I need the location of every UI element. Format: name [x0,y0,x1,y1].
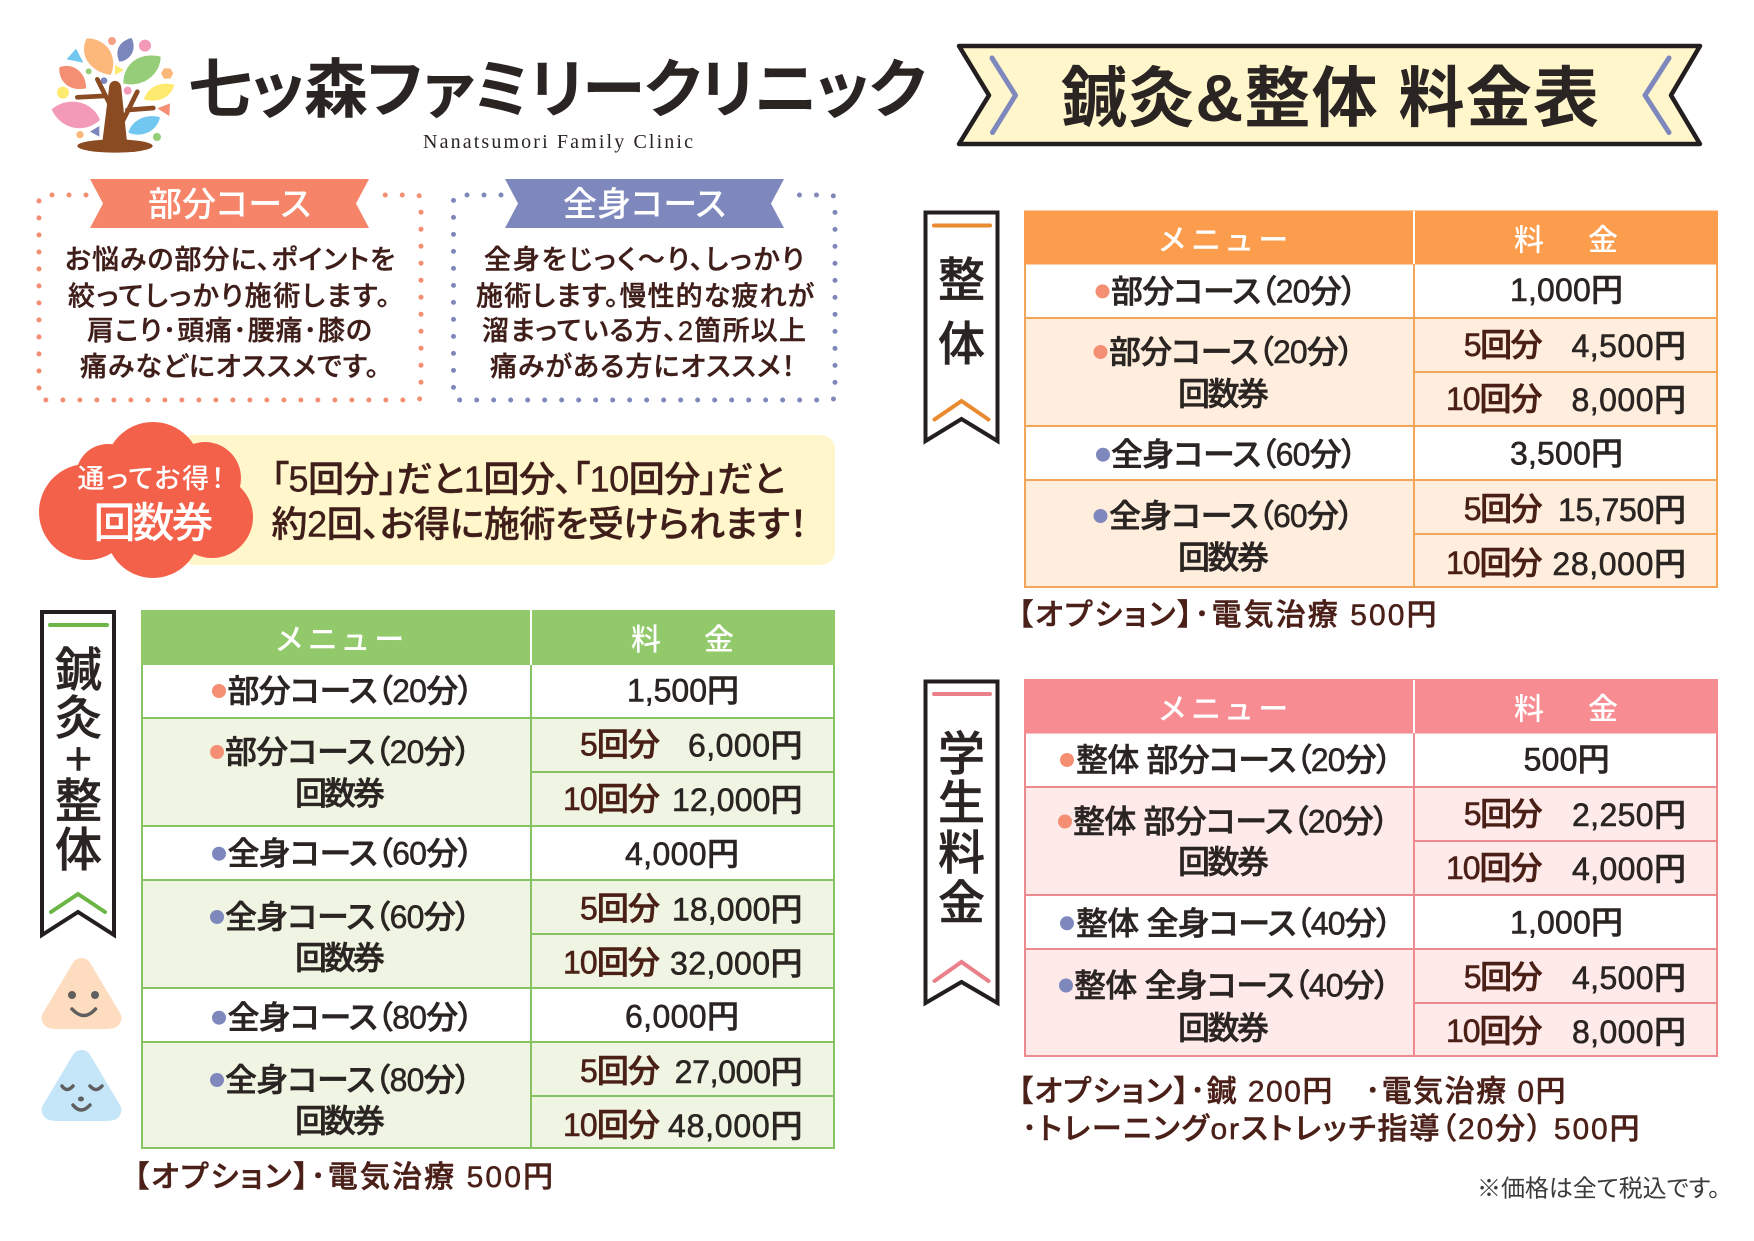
description: full body course: 痛みがある方にオススメ！ [490,352,795,382]
panel: partial course [39,179,421,400]
badge text [78,464,224,546]
row: seitai full body 40 min tickets: 整体 全身コース（40分） [1074,968,1390,1004]
row: full body 60 min tickets: 回数券 [1178,540,1269,576]
row: partial 20 min tickets: 部分コース（20分） [1109,334,1354,370]
table header: 料 金 [631,624,734,657]
row: full body 60 min tickets: 28,000円 [1552,546,1686,582]
table header: 料 金 [1514,224,1618,258]
row: partial 20 min [212,673,739,709]
row: full body 60 min tickets: 5回分 [1464,491,1543,527]
row: partial 20 min [1096,272,1623,309]
table: seitai prices [1024,210,1718,587]
description: partial course [65,245,395,382]
row: seitai full body 40 min tickets: 10回分 [1446,1013,1542,1049]
row: full body 80 min tickets: 48,000円 [668,1108,802,1144]
row: full body 60 min tickets: 10回分 [563,944,660,980]
callout: coupon tickets [39,422,835,578]
option note: acupuncture + seitai: 【オプション】･電気治療 500円 [134,1161,553,1194]
row: full body 60 min [1096,436,1623,473]
callout message [271,458,808,544]
row: seitai full body 40 min: 1,000円 [1510,904,1623,940]
description: full body course: 全身をじっく～り、しっかり [484,245,804,275]
banner: partial course [90,179,369,228]
option notes: student prices: 【オプション】･鍼 200円 ･電気治療 0円 [1018,1076,1566,1108]
ribbon label: student prices [926,682,998,1003]
table: acupuncture + seitai prices [141,610,835,1148]
ribbon label: acupuncture + seitai: 体 [55,824,102,876]
row: full body 60 min tickets [210,890,802,981]
clinic name in English: Nanatsumori Family Clinic [423,131,693,153]
row: partial 20 min tickets: 回数券 [1178,376,1269,412]
ribbon label: acupuncture + seitai [42,612,114,935]
row: full body 80 min tickets: 全身コース（80分） [225,1062,471,1098]
row: full body 80 min: 全身コース（80分） [228,1000,474,1036]
ribbon label: student prices: 生 [938,776,985,830]
row: partial 20 min tickets [1094,327,1686,418]
ribbon label: acupuncture + seitai: 灸 [55,692,102,744]
description: partial course: 絞ってしっかり施術します。 [68,282,390,312]
callout message: 約2回、お得に施術を受けられます！ [272,504,808,544]
description: partial course: 痛みなどにオススメです。 [80,352,379,382]
option note: seitai: 【オプション】･電気治療 500円 [1018,599,1436,632]
row: seitai partial 20 min tickets: 2,250円 [1572,797,1686,833]
ribbon label: seitai [926,212,998,441]
row: partial 20 min tickets [210,726,802,818]
row: seitai full body 40 min: 整体 全身コース（40分） [1076,905,1392,941]
row: full body 60 min tickets: 全身コース（60分） [225,899,471,935]
tax note: ※価格は全て税込です。 [1477,1176,1720,1202]
row: full body 60 min: 全身コース（60分） [1111,437,1357,473]
badge text: 回数券 [94,500,214,546]
banner: full body course: 全身コース [563,186,726,224]
row: seitai partial 20 min tickets: 4,000円 [1572,851,1686,887]
row: full body 80 min [212,999,739,1036]
row: full body 60 min [212,836,739,872]
ribbon label: seitai: 整 [938,254,985,306]
row: seitai full body 40 min [1060,904,1623,941]
row: full body 60 min tickets: 全身コース（60分） [1109,498,1354,534]
clinic name: 七ッ森ファミリークリニック [188,54,926,126]
row: full body 60 min tickets: 10回分 [1446,545,1542,581]
ribbon label: acupuncture + seitai: 鍼 [55,644,102,696]
row: full body 80 min tickets [210,1053,803,1144]
callout message: 「5回分」だと1回分、「10回分」だと [271,458,785,500]
row: partial 20 min tickets: 5回分 [1464,327,1543,363]
row: partial 20 min: 1,000円 [1510,272,1623,308]
row: partial 20 min tickets: 5回分 [580,726,660,762]
row: partial 20 min tickets: 回数券 [295,776,385,812]
row: seitai partial 20 min tickets: 回数券 [1178,844,1269,880]
row: full body 60 min tickets: 18,000円 [672,892,802,928]
clinic logo: colorful tree [52,37,174,153]
callout cloud badge [39,422,253,578]
ribbon label: student prices: 金 [938,876,985,930]
row: seitai full body 40 min tickets: 5回分 [1464,959,1543,995]
icon: sleeping blue face [52,1060,111,1111]
row: partial 20 min: 1,500円 [627,673,739,709]
ribbon label: seitai: 体 [938,318,985,370]
table header: メニュー [276,624,404,657]
table header [141,610,835,665]
description: full body course [476,245,814,382]
title ribbon [959,46,1700,144]
description: full body course: 溜まっている方、2箇所以上 [482,316,806,346]
table header [1024,680,1718,734]
option notes: student prices [1018,1076,1640,1146]
table header: メニュー [1159,224,1288,258]
ribbon label: acupuncture + seitai: 整 [55,774,102,828]
row: seitai partial 20 min tickets: 5回分 [1464,796,1543,832]
option notes: student prices: ･トレーニングorストレッチ指導（20分） 500円 [1022,1113,1640,1146]
icon: smiling peach face [52,968,111,1019]
ribbon label: acupuncture + seitai: + [65,732,92,784]
row: seitai full body 40 min tickets: 4,500円 [1572,960,1686,996]
table header: 料 金 [1514,694,1618,726]
row: partial 20 min tickets: 4,500円 [1572,328,1686,364]
row: seitai partial 20 min: 整体 部分コース（20分） [1076,742,1392,778]
row: full body 60 min tickets [1094,491,1686,582]
row: full body 80 min tickets: 27,000円 [675,1054,803,1090]
row: seitai full body 40 min tickets: 8,000円 [1572,1014,1686,1050]
description: partial course: 肩こり･頭痛･腰痛･膝の [87,316,372,346]
row: partial 20 min tickets: 部分コース（20分） [225,734,471,770]
row: partial 20 min tickets: 10回分 [563,781,660,817]
row: full body 60 min: 4,000円 [625,836,739,872]
description: full body course: 施術します。慢性的な疲れが [476,282,814,312]
row: seitai partial 20 min: 500円 [1524,742,1610,778]
row: full body 60 min tickets: 回数券 [295,940,385,976]
table: student prices [1024,680,1718,1056]
banner: partial course: 部分コース [148,186,311,224]
row: full body 80 min: 6,000円 [625,999,739,1035]
table header: メニュー [1159,694,1288,726]
row: full body 80 min tickets: 10回分 [563,1107,660,1143]
row: seitai full body 40 min tickets [1059,959,1686,1050]
row: full body 60 min tickets: 15,750円 [1558,492,1686,528]
row: seitai partial 20 min tickets: 整体 部分コース（20分） [1073,804,1389,840]
table header [1024,210,1718,264]
row: full body 60 min tickets: 5回分 [580,890,660,926]
description: partial course: お悩みの部分に、ポイントを [65,245,395,275]
row: full body 80 min tickets: 回数券 [295,1103,385,1139]
row: seitai partial 20 min tickets [1058,796,1686,887]
row: partial 20 min tickets: 10回分 [1446,381,1542,417]
row: seitai partial 20 min tickets: 10回分 [1446,850,1542,886]
ribbon label: student prices: 学 [938,728,985,780]
banner: full body course [505,179,784,228]
row: full body 60 min: 3,500円 [1510,436,1623,472]
row: full body 80 min tickets: 5回分 [580,1053,660,1089]
row: partial 20 min tickets: 8,000円 [1572,382,1686,418]
badge text: 通ってお得！ [78,464,224,494]
row: partial 20 min: 部分コース（20分） [1111,273,1357,309]
row: full body 60 min: 全身コース（60分） [228,836,474,872]
title text: 鍼灸&整体 料金表 [1061,61,1599,135]
row: partial 20 min tickets: 6,000円 [688,728,802,764]
panel: full body course [454,179,835,400]
row: partial 20 min tickets: 12,000円 [672,782,802,818]
ribbon label: student prices: 料 [938,826,985,880]
row: full body 60 min tickets: 32,000円 [670,945,802,981]
row: partial 20 min: 部分コース（20分） [228,673,474,709]
row: seitai partial 20 min [1060,742,1610,778]
row: seitai full body 40 min tickets: 回数券 [1178,1010,1269,1046]
